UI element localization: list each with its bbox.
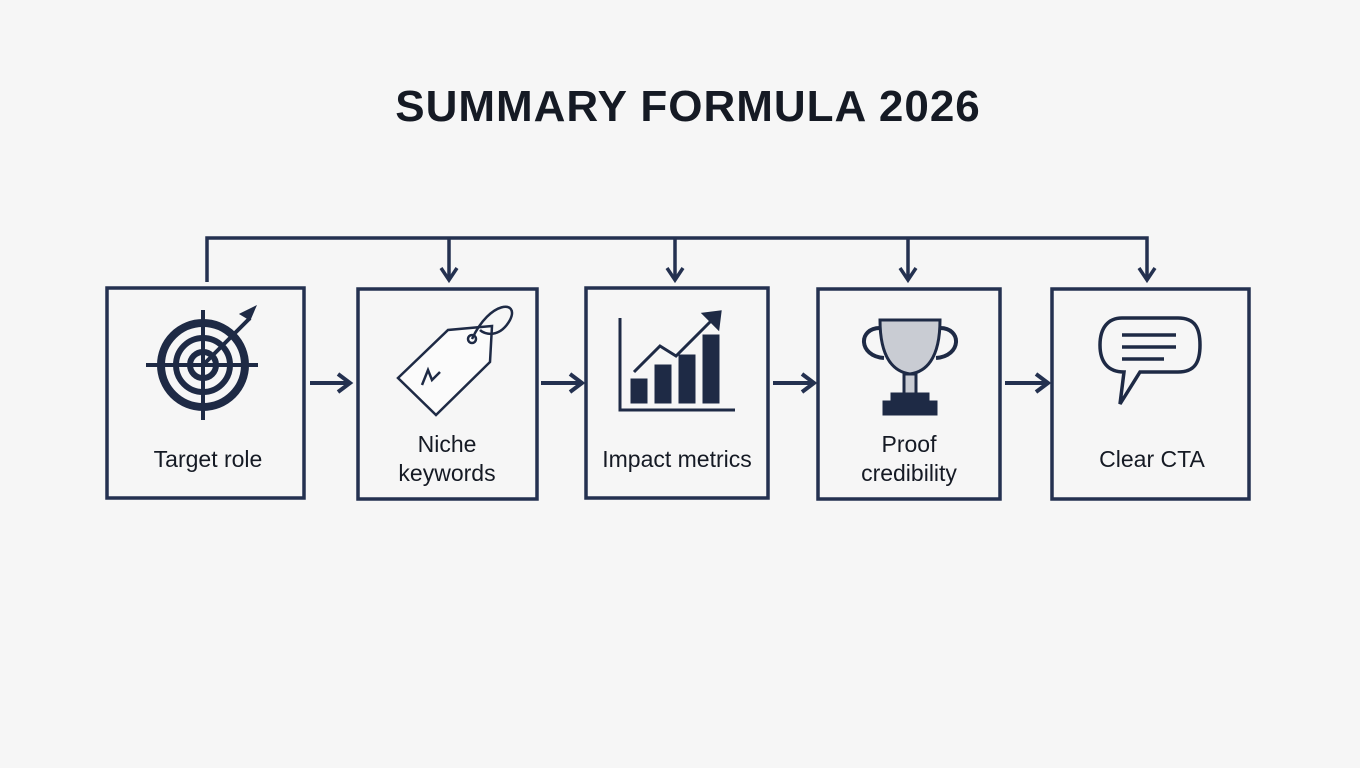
arrow 3 xyxy=(773,374,814,392)
panel: proof credibility: credibility xyxy=(861,460,957,486)
panel: target role: Target role xyxy=(154,446,262,472)
panel: impact metrics xyxy=(586,288,768,498)
icon: speech bubble xyxy=(1100,318,1200,404)
panel: target role xyxy=(107,288,304,498)
panel: clear CTA: Clear CTA xyxy=(1099,446,1205,472)
panel: niche keywords xyxy=(358,289,537,499)
panel: proof credibility: Proof xyxy=(882,431,937,457)
panel: proof credibility xyxy=(818,289,1000,499)
icon: trophy xyxy=(864,320,956,414)
panel: impact metrics: Impact metrics xyxy=(602,446,752,472)
arrow 1 xyxy=(310,374,350,392)
connector: top feedback line xyxy=(207,238,1155,282)
icon: chart xyxy=(620,312,735,410)
icon: tag xyxy=(398,307,512,415)
panel: niche keywords: Niche xyxy=(418,431,476,457)
panel: clear CTA xyxy=(1052,289,1249,499)
title: SUMMARY FORMULA 2026 xyxy=(395,82,981,131)
arrow 2 xyxy=(541,374,582,392)
arrow 4 xyxy=(1005,374,1048,392)
panel: niche keywords: keywords xyxy=(398,460,496,486)
icon: target xyxy=(146,306,258,420)
